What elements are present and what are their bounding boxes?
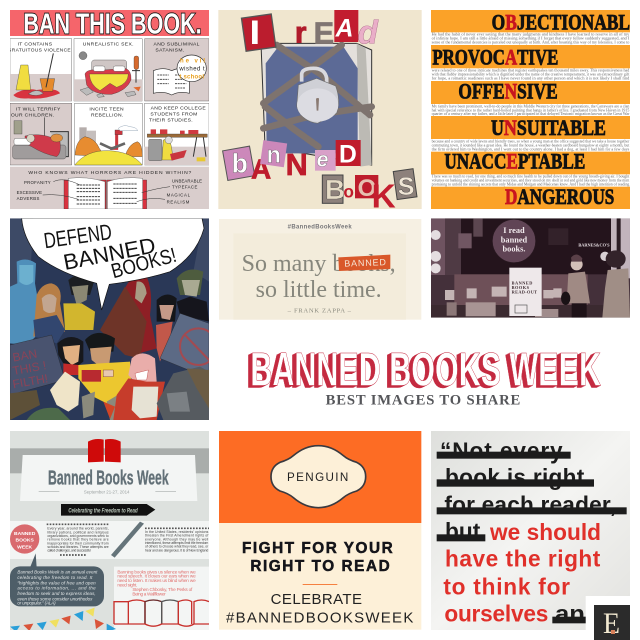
ransom letters: banned: e [317, 148, 329, 172]
ransom letters: books: o [343, 181, 354, 201]
panel: Frank Zappa quote: #BannedBooksWeek [288, 224, 352, 230]
comic cell: subliminal satanism: AND SUBLIMINAL [154, 42, 200, 48]
column text right: intentioned, these attempts limit the freedom [145, 541, 208, 545]
round sign: I read banned books: I read [503, 226, 525, 235]
comic cell: subliminal satanism [145, 39, 209, 101]
embroidered book [261, 43, 372, 167]
struck-out lines: for each reader, [444, 491, 616, 517]
word: dangerous: DANGEROUS [505, 185, 614, 209]
background book text: with that flabby impressionability which is dignified under the name of the creative temperament, it was an extraordinary gift [432, 73, 630, 78]
comic cell: subliminal satanism: wished t [178, 66, 205, 72]
background book text: because and a country of wide lawns and friendly trees, so when a young man at the office suggested that we take a house together [432, 139, 630, 144]
ransom letters: books: K [372, 178, 396, 215]
ransom letters: books: B [325, 174, 345, 205]
speech bubble: DEFEND [42, 219, 113, 253]
struck-out tail: an [555, 601, 585, 627]
comic cell: horrors hidden within: UNBEARABLE [172, 179, 202, 184]
round sign: I read banned books: books. [503, 245, 525, 254]
comic cell: incite teen rebellion [75, 103, 142, 165]
word: unacceptable: UNACCEPTABLE [444, 149, 585, 173]
speech bubble: BANNED [61, 233, 158, 275]
badge: banned books week: BOOKS [16, 538, 34, 544]
man shopper [602, 250, 630, 318]
ransom letters: I read: A [335, 16, 353, 43]
poster headline: FIGHT FOR YOUR [242, 540, 393, 557]
protest sign: ban this filth: BAN [11, 347, 38, 365]
comic cell: unrealistic sex [74, 39, 142, 101]
column text right: threaten the First Amendment rights of [145, 534, 208, 538]
ransom letters: banned: A [251, 153, 271, 184]
quotation card [114, 567, 209, 630]
column text right: of others to choose what they read, see, or [145, 545, 209, 549]
background book text: promising to unfold the shining secrets that only Midas and Morgan and Maecenas knew. And I had the high intention of reading [432, 182, 629, 186]
speech callout: access to information, ... and the [17, 586, 96, 591]
embroidered padlock [297, 68, 339, 123]
background book text: My family have been prominent, well-to-do people in this Middle Western city for three generations, the Carraways are a clan [432, 104, 629, 109]
comic cell: terrify children: OUR CHILDREN. [11, 112, 55, 118]
bunting flags [10, 608, 116, 632]
struck-out lines: book is right [445, 464, 585, 490]
quotation card: need sight. [117, 582, 137, 587]
comic header: BAN THIS BOOK. [23, 8, 202, 40]
column text left: organizations, and governments seek to [47, 534, 109, 538]
panel: bookshop photograph [430, 218, 630, 318]
column text left: called challenges, and successful [47, 549, 91, 553]
text band [10, 521, 209, 559]
panel: objectionable words [431, 10, 630, 209]
ransom letters: banned: b [232, 149, 248, 179]
background book text [432, 33, 630, 186]
comic cell: college students: AND KEEP COLLEGE [151, 106, 206, 112]
logo badge: E [603, 607, 620, 640]
protest sign: ban this filth: FILTH! [11, 371, 49, 391]
comic header [10, 10, 209, 36]
background book text: were related to one of those intricate machines that register earthquakes ten thousand miles away. This responsiveness had [432, 69, 629, 73]
column text left: inappropriate for their community from [47, 541, 109, 545]
column text right: In the United States, residents' opinions [145, 530, 209, 534]
background book text: There was so much to read, for one thing, and so much fine health to be pulled down out of the young breath-giving air. I bought [432, 175, 630, 180]
background book text: quarter of a century after my father, and a little later I participated in that delayed Teutonic migration known as the Great War [432, 112, 630, 117]
panel: I read banned books embroidery [218, 10, 422, 215]
subtitle: BEST IMAGES TO SHARE [326, 392, 521, 408]
ransom letters: books: S [398, 173, 415, 201]
panel: defend banned books comic [10, 218, 217, 420]
panel: banned books week infographic [10, 431, 209, 632]
comic cell: terrify children [10, 103, 72, 165]
round sign: I read banned books [492, 219, 536, 263]
comic cell: horrors hidden within: ADVERBS [17, 196, 39, 201]
column text left: remove books that they believe are [47, 538, 109, 542]
poster: banned books read-out: BANNED [512, 280, 533, 285]
banned sticker [338, 255, 390, 271]
panel: Frank Zappa quote: So many books, [242, 251, 396, 277]
badge: banned books week [10, 524, 39, 554]
comic cell: horrors hidden within: MAGICAL [167, 193, 191, 198]
panel: Penguin poster [219, 431, 421, 630]
woman shopper [561, 254, 590, 318]
panels: row two, quote card, bookshop photo and main title [219, 218, 630, 408]
background book text: hat with special reference to the rather hard-boiled painting that hangs in father's office. I graduated from New Haven in 1915 [432, 108, 629, 112]
comic cell: gratuitous violence [8, 39, 72, 101]
comic cell: horrors hidden within [10, 167, 209, 209]
badge: banned books week: BANNED [14, 531, 36, 537]
comic cell: horrors hidden within: TYPEFACE [172, 185, 197, 190]
hashtag call: CELEBRATE [271, 591, 362, 608]
column text left: schools and libraries. These attempts are [47, 545, 109, 549]
quotation card: Banning books gives us silence when we [117, 569, 196, 574]
ransom letters: I read [241, 10, 379, 51]
ransom letters: books [322, 169, 417, 215]
speech callout: freedom to seek and to express ideas, [17, 591, 96, 596]
ransom letters: I read: r [295, 17, 306, 50]
background book text: of infinite hope. I am still a little afraid of missing something if I forget that every fellow suddenly suggested, and I [432, 37, 630, 42]
quotation card: need to listen. It makes us blind when we [117, 578, 196, 583]
ribbon heading: Celebrating the Freedom to Read [68, 508, 138, 514]
comic cell: horrors hidden within: EXCESSIVE [17, 190, 42, 195]
speech callout: celebrating the freedom to read. It [17, 575, 93, 580]
comic cell: incite teen rebellion: INCITE TEEN [89, 106, 124, 112]
background book text: He had the habit of never ever saying that the many judgments and kindness I have learned to reserve in all of my [432, 33, 629, 37]
ransom letters: banned [223, 140, 361, 184]
comic cell: subliminal satanism: t school [179, 75, 204, 81]
orange word bands [431, 10, 630, 209]
comic cell: college students: THEIR STUDIES. [149, 117, 193, 123]
protest sign: crossed-out book [160, 313, 209, 370]
poster: banned books read-out: READ-OUT [512, 290, 537, 295]
poster: banned books read-out: BOOKS [512, 285, 530, 290]
comic cell: horrors hidden within: WHO KNOWS WHAT HORRORS ARE HIDDEN WITHIN? [28, 170, 192, 176]
background book text: volumes on banking and credit and investment securities, and they stood on my shelf in red and gold like new money from the mint [432, 179, 630, 184]
embroidered chains [263, 45, 372, 147]
ransom letters: banned: N [286, 148, 308, 182]
comic cell: gratuitous violence: IT CONTAINS [18, 42, 53, 48]
comic cell: unrealistic sex: UNREALISTIC SEX. [83, 42, 134, 48]
title plate: Banned Books Week [48, 466, 169, 489]
speech bubble: BOOKS! [109, 244, 179, 283]
comic cell: terrify children: IT WILL TERRIFY [16, 106, 61, 112]
red quote text: to think for [443, 573, 570, 599]
word: unsuitable: UNSUITABLE [491, 116, 606, 140]
badge: banned books week: WEEK [17, 544, 33, 550]
penguin cartouche: PENGUIN [287, 471, 348, 484]
speech callout: "highlights the value of free and open [17, 580, 96, 585]
background book text: sense of the fundamental decencies is parceled out unequally at birth. And, after boasting this way of my tolerance, I come to [432, 41, 629, 46]
title plate: September 21-27, 2014 [84, 489, 130, 494]
comic cell: horrors hidden within: PROFANITY [24, 180, 51, 185]
hashtag call [226, 591, 413, 626]
struck-out lines [437, 437, 627, 544]
ribbon heading [61, 504, 155, 516]
panel: Ban This Book comic [8, 8, 209, 209]
background book text: for hope, a romantic readiness such as I have never found in any other person and which it is not likely I shall find [432, 77, 629, 82]
poster headline: RIGHT TO READ [250, 558, 390, 575]
red quote text: we should [489, 519, 601, 545]
banned sticker: BANNED [344, 257, 387, 269]
quotation card: Stephen Chbosky, The Perks of [132, 587, 193, 592]
struck-out lines: “Not every [440, 437, 563, 463]
speech callout: even those some consider unorthodox [17, 596, 93, 601]
red quote text [443, 519, 601, 627]
struck-out lines: but [445, 518, 481, 544]
poster headline [242, 540, 393, 575]
divider [303, 584, 337, 585]
comic cell: incite teen rebellion: REBELLION. [91, 112, 124, 118]
protest sign: ban this filth [10, 335, 65, 395]
column text right: everyone. Although they may be well [145, 537, 209, 541]
panel: Frank Zappa quote: – FRANK ZAPPA – [287, 307, 352, 314]
hashtag call: #BANNEDBOOKSWEEK [226, 609, 413, 626]
column text right: hear and are dangerous. It is of New England [145, 548, 208, 552]
quotation card: need speech. It closes our ears when we [117, 574, 196, 579]
ransom letters: banned: n [267, 142, 281, 168]
speech callout: or unpopular." (ALA) [17, 600, 56, 605]
ransom letters: I read: E [314, 16, 334, 50]
hatched banner strip [10, 448, 209, 473]
column text left: Every year, around the world, parents, [47, 527, 109, 531]
quotation card: Being a Wallflower [132, 592, 166, 597]
panel: Frank Zappa quote [219, 219, 421, 320]
red book icon [88, 439, 121, 462]
ransom letters: I read: d [358, 14, 379, 51]
ransom letters: books: O [358, 175, 376, 202]
round sign: I read banned books: banned [501, 235, 528, 244]
logo badge [586, 596, 640, 640]
red quote text: ourselves [444, 601, 548, 627]
red quote text: have the right [445, 546, 601, 572]
protest sign: ban this filth: THIS ! [11, 358, 47, 378]
panel: bookshop photograph: BARNES&CO'S [578, 242, 610, 247]
crowd: back row [10, 260, 209, 362]
panel: Frank Zappa quote: so little time. [256, 277, 382, 303]
title plate [20, 455, 197, 501]
column text left [47, 524, 109, 555]
comic cell: college students [145, 103, 209, 165]
penguin cartouche [271, 446, 366, 508]
panel: struck-through quote [431, 431, 630, 630]
pencil divider [111, 522, 144, 558]
poster: banned books read-out [509, 268, 542, 316]
speech bubble [22, 218, 204, 310]
word: provocative: PROVOCATIVE [432, 46, 558, 70]
ransom letters: I read: I [250, 14, 259, 50]
ransom letters: banned: D [339, 142, 357, 169]
column text left: library patrons, political and religious [47, 530, 109, 534]
comic cell: horrors hidden within: REALISM [167, 199, 190, 204]
crowd: front row [10, 333, 209, 420]
word: offensive: OFFENSIVE [458, 79, 558, 103]
row of book outlines [114, 600, 209, 626]
comic cell: gratuitous violence: GRATUITOUS VIOLENCE [8, 48, 71, 54]
background book text: the firm ordered him to Washington, and I went out to the country alone. I had a dog, at least I had him for a few days [432, 147, 630, 152]
background book text: commuting town, it sounded like a great idea. He found the house, a weather-beaten cardboard bungalow at eighty a month, but [432, 143, 630, 148]
comic cell: college students: STUDENTS FROM [150, 112, 198, 118]
comic cell: subliminal satanism: SATANISM. [155, 48, 185, 54]
speech callout [10, 553, 104, 606]
speech callout: Banned Books Week is an annual event [17, 570, 98, 575]
comic cell: subliminal satanism: he vil [180, 59, 205, 65]
column text right [145, 528, 209, 552]
